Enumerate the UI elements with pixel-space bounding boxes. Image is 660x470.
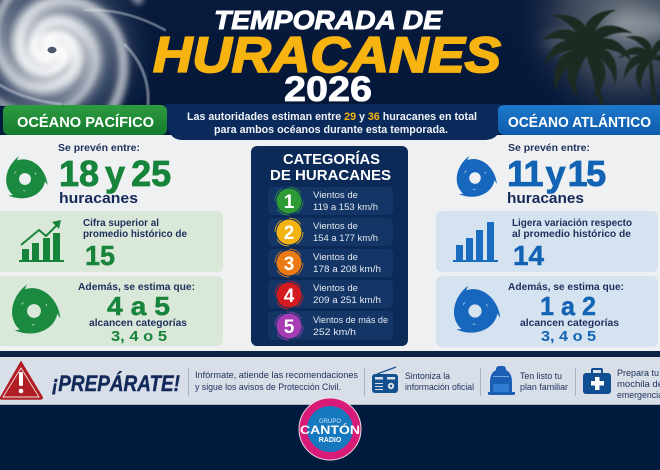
panel: Pacific major hurricanes xyxy=(0,276,223,346)
intro banner xyxy=(165,104,500,140)
panel: Atlantic historic average: al promedio histórico de xyxy=(512,229,632,240)
logo: Grupo Cantón Radio: GRUPO xyxy=(319,419,341,425)
heading: Océano Atlántico xyxy=(498,105,660,135)
icon: blue hurricane xyxy=(448,156,497,207)
intro banner: Las autoridades estiman entre 29 y 36 huracanes en total xyxy=(187,111,477,123)
category 2: Vientos de xyxy=(313,221,358,231)
category 1: 119 a 153 km/h xyxy=(313,202,378,212)
panel: Hurricane categories: DE HURACANES xyxy=(270,167,391,184)
category 5: 252 km/h xyxy=(313,327,356,337)
icon: green hurricane xyxy=(0,156,48,208)
panel: Atlantic historic average: Ligera variación respecto xyxy=(512,218,632,229)
panel: Atlantic major hurricanes: 1 a 2 xyxy=(540,291,596,321)
category 3 xyxy=(268,249,393,277)
category 5: Vientos de más de xyxy=(313,315,388,325)
panel: Hurricane categories: CATEGORÍAS xyxy=(283,151,380,168)
outer cloud bands xyxy=(0,10,165,104)
panel: Atlantic historic average xyxy=(436,211,658,272)
icon: blue hurricane large xyxy=(443,286,500,344)
icon: bar chart xyxy=(453,222,498,262)
text: stay informed xyxy=(195,370,358,392)
panel: Pacific historic average xyxy=(0,211,223,272)
panel: Atlantic major hurricanes: Además, se estima que: xyxy=(508,281,624,293)
category 3: 178 a 208 km/h xyxy=(313,264,381,274)
intro banner: para ambos océanos durante esta temporada. xyxy=(214,124,448,136)
panel: Atlantic major hurricanes: 3, 4 o 5 xyxy=(541,328,596,345)
category 5 xyxy=(268,311,393,340)
icon: first aid kit xyxy=(583,369,611,394)
storm clouds xyxy=(532,0,660,105)
panel: Pacific forecast xyxy=(0,142,171,208)
icon: green hurricane large xyxy=(1,285,60,345)
heading: Océano Pacífico: OCÉANO PACÍFICO xyxy=(17,114,154,131)
panel: Pacific major hurricanes: alcancen categorías xyxy=(89,318,187,329)
category 1: Vientos de xyxy=(313,190,358,200)
panel: Hurricane categories xyxy=(251,146,408,346)
category 4: 209 a 251 km/h xyxy=(313,295,381,305)
title: TEMPORADA DE xyxy=(214,5,443,35)
text: emergency kit: Prepara tu xyxy=(617,368,659,378)
logo: Grupo Cantón Radio: CANTÓN xyxy=(300,422,360,437)
heading: prepare: ¡PREPÁRATE! xyxy=(52,371,180,396)
title: HURACANES xyxy=(153,27,501,83)
title xyxy=(153,5,501,109)
body background xyxy=(0,135,660,351)
panel: Pacific historic average: promedio histórico de xyxy=(83,229,188,240)
logo: Grupo Cantón Radio: RADIO xyxy=(319,437,342,444)
icon: backpack xyxy=(488,366,515,395)
category 2 xyxy=(268,218,393,246)
category 5: 5 xyxy=(284,317,295,338)
text: tune in xyxy=(405,371,474,392)
text: tune in: información oficial xyxy=(405,382,474,392)
text: tune in: Sintoniza la xyxy=(405,371,451,381)
text: stay informed: Infórmate, atiende las recomendaciones xyxy=(195,370,358,380)
panel: Atlantic forecast: huracanes xyxy=(507,190,584,207)
category 2: 2 xyxy=(284,223,294,244)
panel: Pacific forecast: Se prevén entre: xyxy=(58,142,140,154)
header: storm background xyxy=(0,0,660,106)
panel: Atlantic major hurricanes: alcancen categorías xyxy=(520,318,619,329)
category 4: Vientos de xyxy=(313,283,358,293)
panel: Atlantic historic average: 14 xyxy=(513,240,544,271)
icon: radio xyxy=(372,367,398,393)
text: family plan xyxy=(520,371,568,392)
panel: Atlantic major hurricanes xyxy=(436,276,658,347)
category 4 xyxy=(268,280,393,309)
category 2: 154 a 177 km/h xyxy=(313,233,378,243)
text: family plan: plan familiar xyxy=(520,382,568,392)
panel: Atlantic forecast xyxy=(448,142,606,207)
heading: Océano Pacífico xyxy=(3,105,167,135)
panel: Pacific historic average: Cifra superior al xyxy=(83,218,159,229)
panel: Atlantic forecast: Se prevén entre: xyxy=(508,142,590,154)
title: 2026 xyxy=(284,70,372,109)
icon: warning triangle xyxy=(0,362,42,399)
panel: Pacific major hurricanes: Además, se estima que: xyxy=(78,281,195,293)
satellite hurricane image xyxy=(0,0,167,106)
heading: Océano Atlántico: OCÉANO ATLÁNTICO xyxy=(508,114,651,131)
panel: Atlantic forecast: 11 y 15 xyxy=(507,153,606,194)
category 1 xyxy=(268,187,393,215)
palm trees xyxy=(540,9,660,105)
text: emergency kit xyxy=(617,368,660,400)
panel: Pacific forecast: 18 y 25 xyxy=(59,153,171,194)
panel: Pacific historic average: 15 xyxy=(85,240,115,271)
panel: Pacific major hurricanes: 4 a 5 xyxy=(107,291,170,321)
category 3: Vientos de xyxy=(313,252,358,262)
panel: Pacific forecast: huracanes xyxy=(59,190,138,207)
category 4: 4 xyxy=(284,286,295,307)
panel: Pacific major hurricanes: 3, 4 o 5 xyxy=(111,328,167,345)
logo: Grupo Cantón Radio xyxy=(299,398,361,460)
category 3: 3 xyxy=(284,254,294,275)
icon: rising bar chart xyxy=(19,220,64,262)
text: family plan: Ten listo tu xyxy=(520,371,562,381)
text: stay informed: y sigue los avisos de Protección Civil. xyxy=(195,382,341,392)
category 1: 1 xyxy=(284,192,295,213)
bottom preparedness bar xyxy=(0,351,660,405)
